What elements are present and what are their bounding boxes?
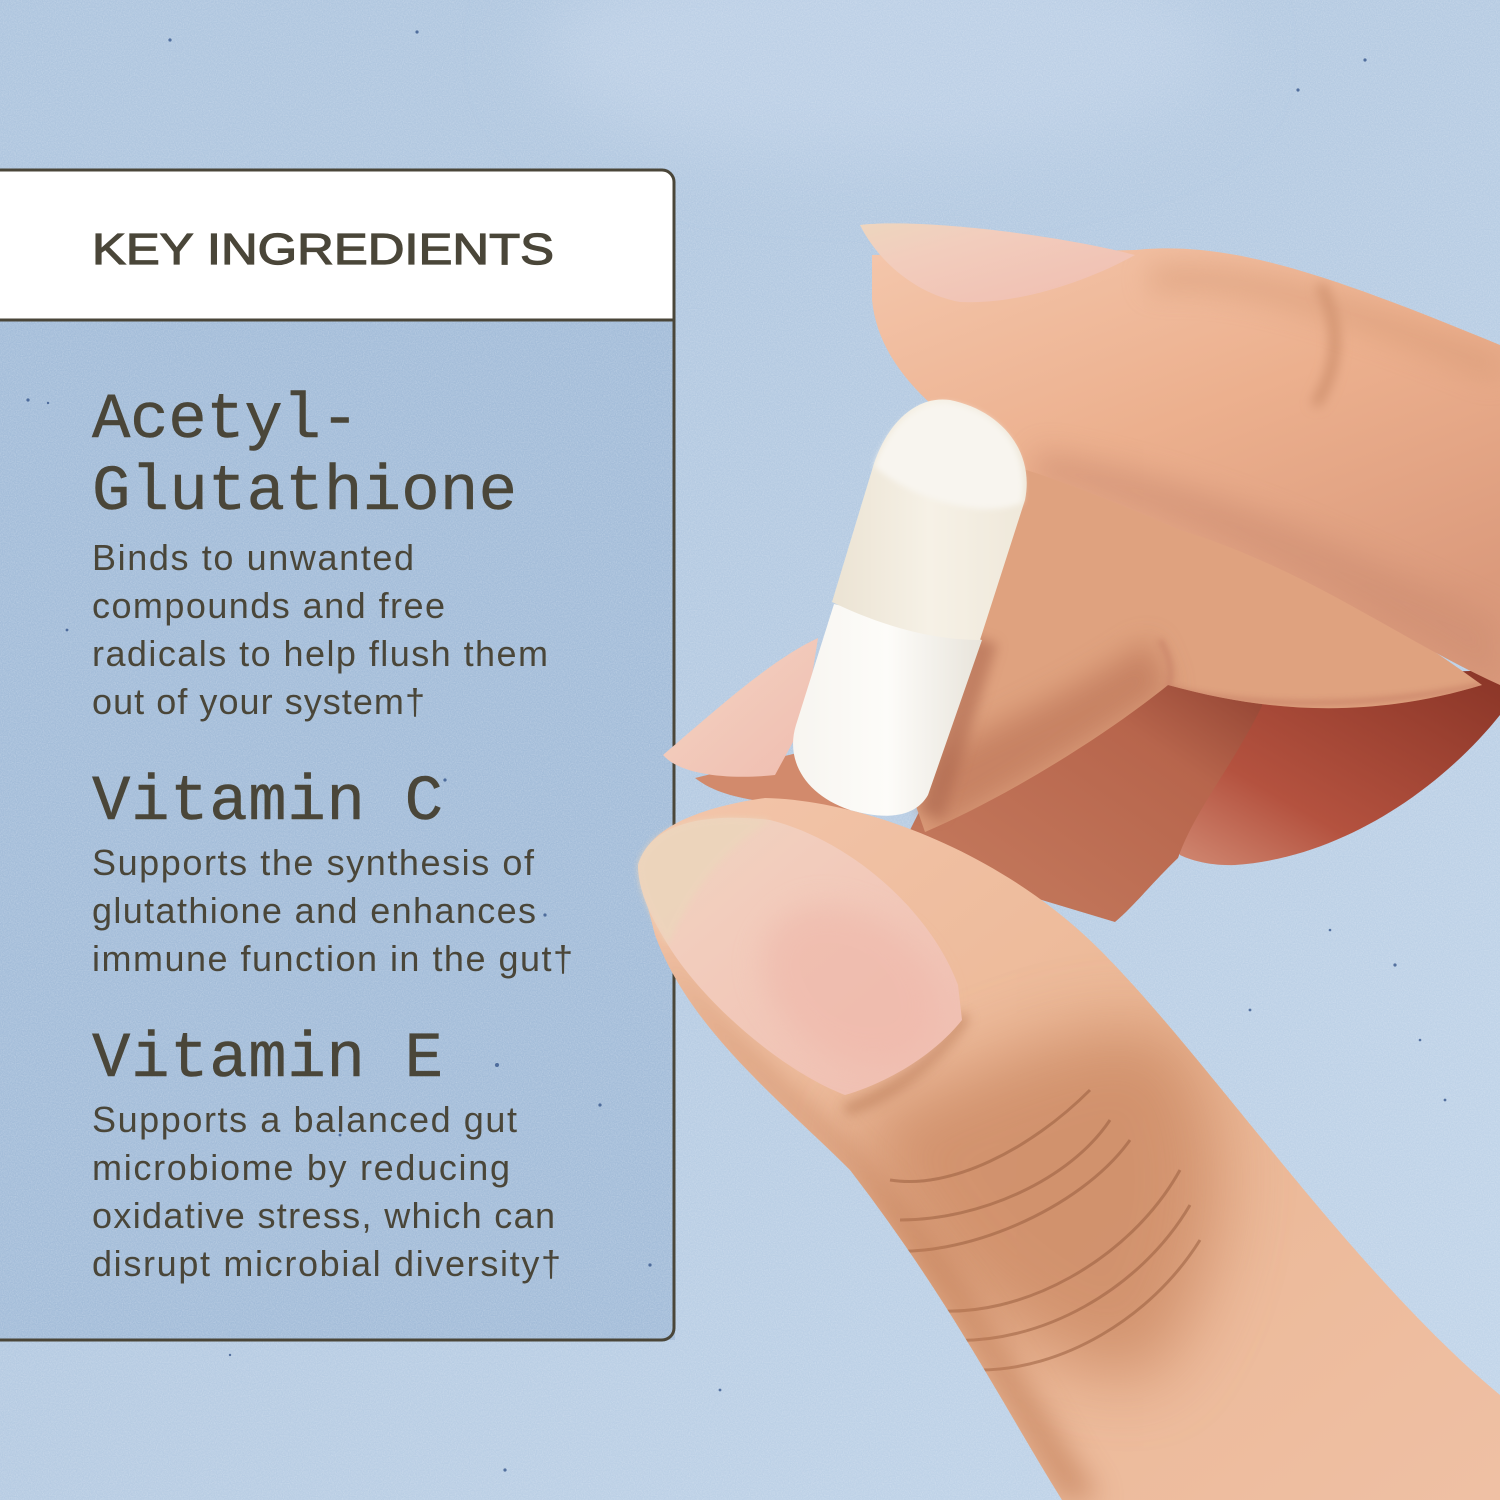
panel outline	[0, 170, 674, 1340]
lower finger	[900, 670, 1262, 922]
panel background	[0, 320, 675, 1340]
skin under back nail	[695, 740, 850, 815]
ingredient: vitamin e: Supports a balanced gut	[92, 1099, 517, 1140]
ingredient: acetyl-glutathione: out of your system†	[92, 681, 425, 722]
ingredient: vitamin e	[92, 1024, 561, 1284]
ingredient: acetyl-glutathione: compounds and free	[92, 585, 445, 626]
ingredient: acetyl-glutathione: radicals to help flush them	[92, 633, 548, 674]
capsule	[793, 399, 1027, 816]
thumb nail centre	[732, 873, 968, 1097]
ingredient: acetyl-glutathione: Glutathione	[92, 457, 517, 529]
hand with capsule	[638, 223, 1500, 1500]
ingredient: acetyl-glutathione: Acetyl-	[92, 385, 359, 457]
ingredient: acetyl-glutathione	[92, 385, 548, 722]
ingredient: vitamin c	[92, 767, 573, 979]
thumb nail	[638, 818, 962, 1095]
panel header	[0, 170, 674, 320]
thumb nail tip	[638, 818, 770, 945]
back nail	[663, 638, 818, 777]
ingredient: vitamin e: oxidative stress, which can	[92, 1195, 555, 1236]
middle finger	[900, 440, 1482, 832]
ingredient: vitamin c: Vitamin C	[92, 767, 443, 839]
capsule dome highlight	[874, 403, 1023, 509]
capsule shadow	[930, 640, 985, 815]
ingredient: acetyl-glutathione: Binds to unwanted	[92, 537, 414, 578]
capsule bottom half	[793, 604, 982, 816]
ingredient: vitamin c: glutathione and enhances	[92, 890, 536, 931]
panel: key ingredients	[0, 170, 674, 1340]
ingredient: vitamin c: Supports the synthesis of	[92, 842, 535, 883]
index finger	[872, 248, 1500, 685]
ingredient: vitamin e: Vitamin E	[92, 1024, 443, 1096]
ingredient: vitamin c: immune function in the gut†	[92, 938, 573, 979]
ingredient: vitamin e: disrupt microbial diversity†	[92, 1243, 561, 1284]
thumb	[638, 798, 1500, 1500]
ingredient: vitamin e: microbiome by reducing	[92, 1147, 510, 1188]
index nail	[860, 223, 1135, 302]
heading: key ingredients: KEY INGREDIENTS	[92, 225, 554, 274]
capsule top half	[832, 399, 1027, 640]
ring finger	[1160, 670, 1500, 865]
